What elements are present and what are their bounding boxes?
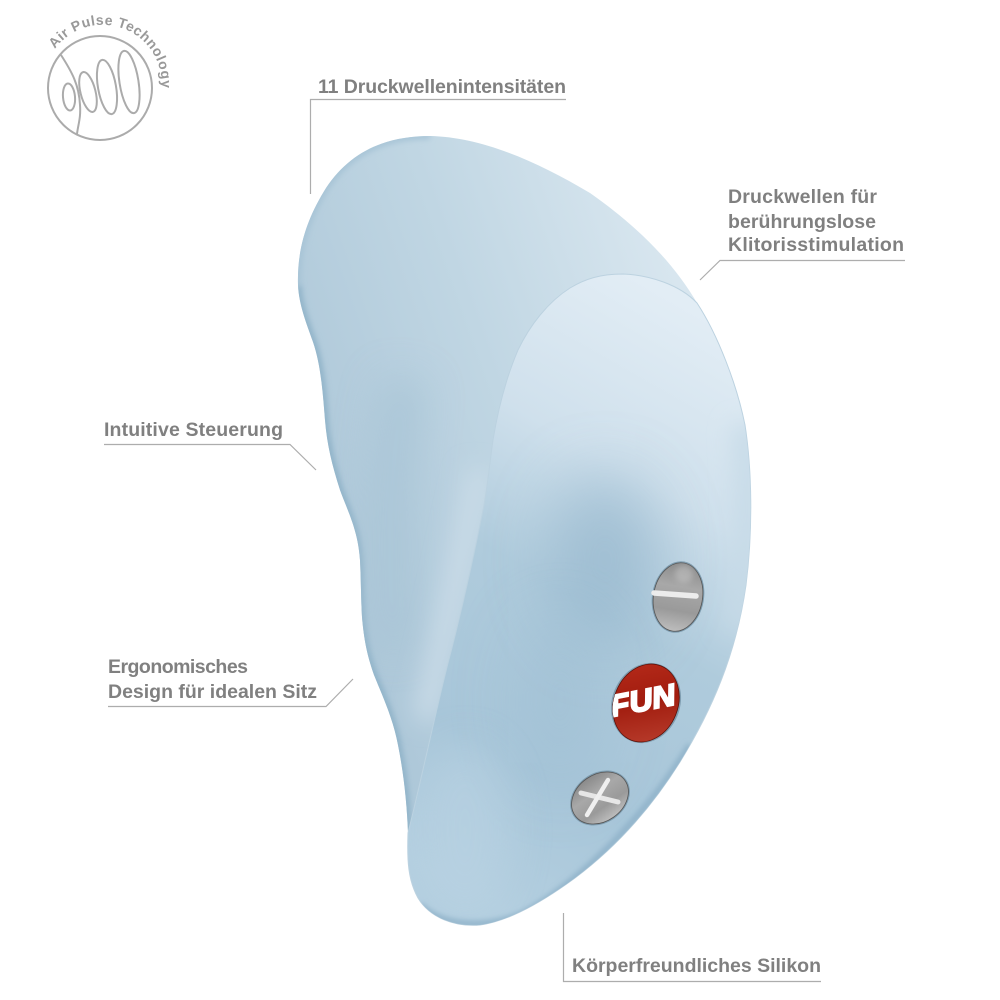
device back body [298,136,696,832]
callout: Druckwellen für berührungslose Klitorisstimulation: berührungslose [728,211,876,233]
callout: Körperfreundliches Silikon [564,913,821,982]
device front face [408,274,751,925]
button: FUN logo [611,662,681,744]
callout: 11 Druckwellenintensitäten: 11 Druckwellenintensitäten [318,76,566,98]
callout: Druckwellen für berührungslose Klitorisstimulation [700,186,905,280]
callout: Intuitive Steuerung: Intuitive Steuerung [104,419,283,441]
callout: Ergonomisches Design für idealen Sitz: Ergonomisches [108,656,248,678]
callout: Druckwellen für berührungslose Klitorisstimulation: Klitorisstimulation [728,234,904,256]
button: plus [559,759,641,837]
button: FUN logo: FUN [607,678,680,724]
callout: Ergonomisches Design für idealen Sitz: Design für idealen Sitz [108,681,317,703]
callout: Ergonomisches Design für idealen Sitz [108,656,353,706]
callout: Druckwellen für berührungslose Klitorisstimulation: Druckwellen für [728,186,877,208]
callout: Intuitive Steuerung [104,419,316,470]
callout: Körperfreundliches Silikon: Körperfreundliches Silikon [572,955,821,977]
logo: Air Pulse Technology: Air Pulse Technology [50,15,169,88]
logo: Air Pulse Technology [47,15,169,141]
button: minus [646,557,710,637]
product: air pulse device [298,136,751,925]
callout: 11 Druckwellenintensitäten [310,76,566,194]
